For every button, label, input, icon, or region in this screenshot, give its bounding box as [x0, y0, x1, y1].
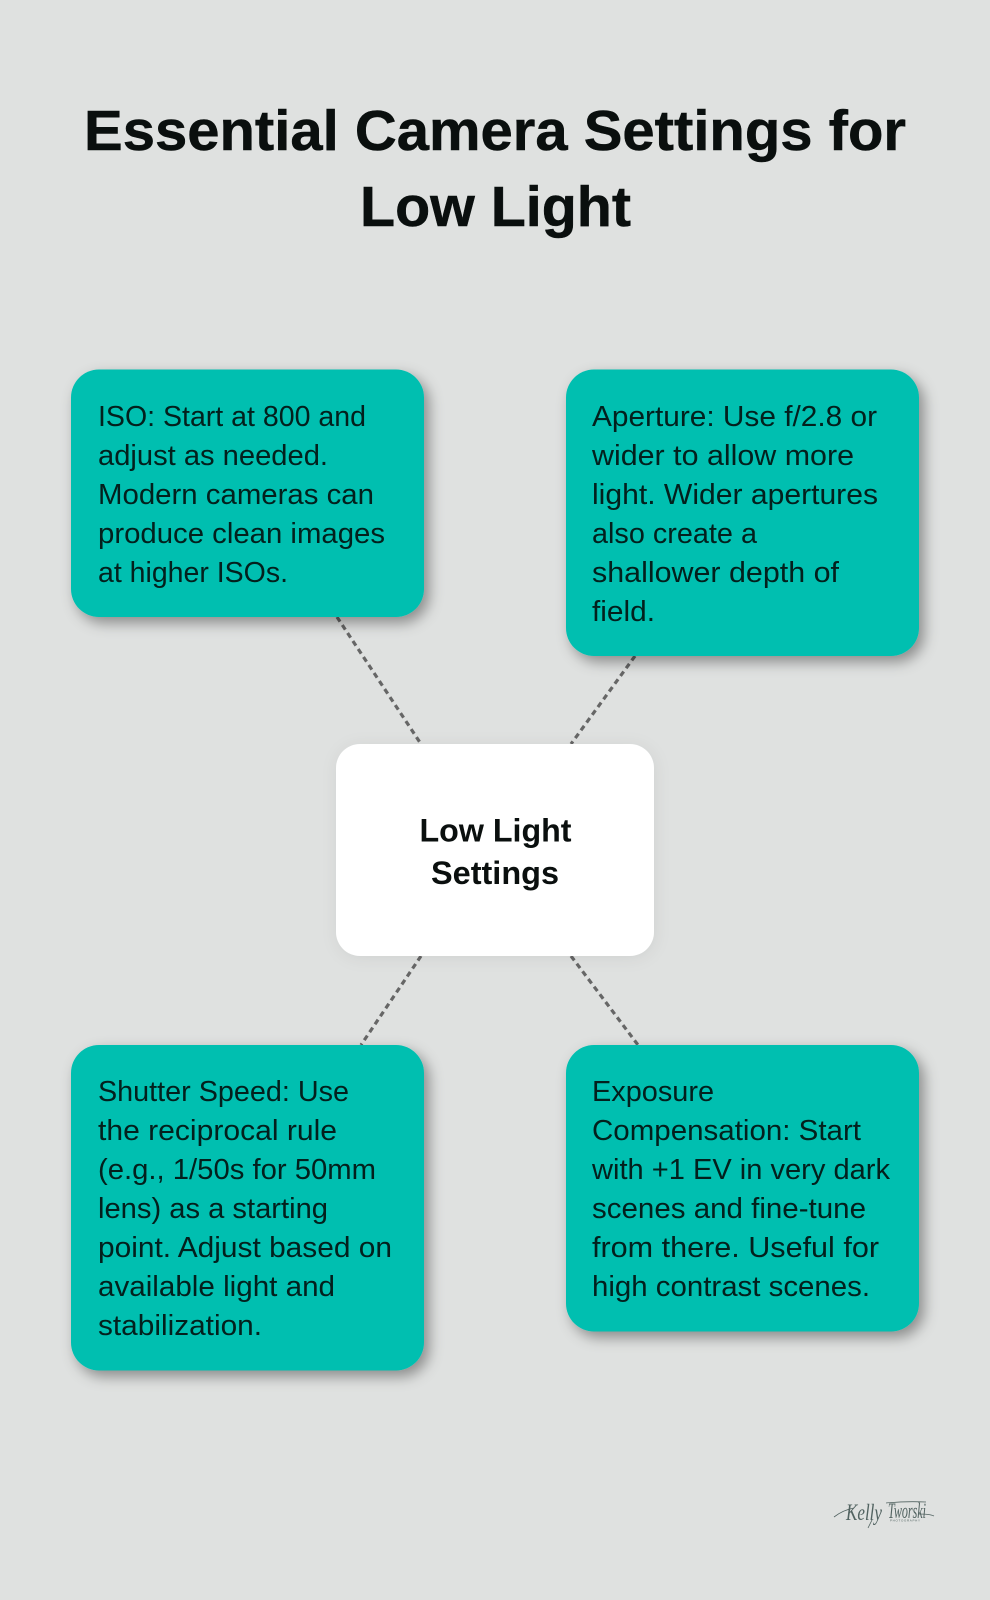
panel: shutter speed: available light and	[98, 1271, 335, 1303]
panel: exposure compensation: Compensation: Start	[592, 1115, 861, 1147]
logo: signature: Tworski	[888, 1498, 926, 1523]
panel: exposure compensation: high contrast scenes.	[592, 1271, 870, 1303]
panel: aperture: Aperture: Use f/2.8 or	[592, 401, 877, 433]
panel: shutter speed	[71, 1045, 424, 1370]
panel: shutter speed: stabilization.	[98, 1310, 262, 1342]
panel: shutter speed: Shutter Speed: Use	[98, 1076, 349, 1108]
panel: center hub: Settings	[431, 855, 559, 891]
panel: aperture: field.	[592, 596, 655, 628]
panel: exposure compensation: scenes and fine-tune	[592, 1193, 866, 1225]
panel: center hub: Low Light	[420, 812, 572, 848]
title: Low Light	[360, 175, 631, 239]
panel: shutter speed: point. Adjust based on	[98, 1232, 392, 1264]
logo: signature	[834, 1498, 934, 1528]
connector: exposure compensation to center	[571, 956, 638, 1045]
panel: exposure compensation: from there. Useful for	[592, 1232, 879, 1264]
logo: signature: PHOTOGRAPHY	[890, 1518, 920, 1522]
logo: signature: Kelly	[845, 1500, 883, 1525]
panel: exposure compensation: Exposure	[592, 1076, 714, 1108]
panel: aperture: shallower depth of	[592, 557, 840, 589]
panel: aperture: wider to allow more	[591, 440, 854, 472]
panel: shutter speed: (e.g., 1/50s for 50mm	[98, 1154, 376, 1186]
title: Essential Camera Settings for	[84, 99, 906, 163]
panel: ISO	[71, 370, 424, 617]
title	[84, 99, 906, 239]
panel: ISO: at higher ISOs.	[98, 557, 288, 589]
panel: exposure compensation: with +1 EV in very dark	[591, 1154, 890, 1186]
panel: aperture: also create a	[592, 518, 758, 550]
connector: aperture to center	[571, 656, 635, 744]
panel: ISO: ISO: Start at 800 and	[98, 401, 366, 433]
panel: aperture: light. Wider apertures	[592, 479, 878, 511]
panel: ISO: adjust as needed.	[98, 440, 328, 472]
panel: shutter speed: lens) as a starting	[98, 1193, 328, 1225]
panel: shutter speed: the reciprocal rule	[98, 1115, 337, 1147]
panel: aperture	[566, 370, 919, 656]
panel: center hub	[336, 744, 654, 956]
panel: ISO: Modern cameras can	[98, 479, 374, 511]
panel: ISO: produce clean images	[98, 518, 385, 550]
connector: ISO to center	[337, 617, 421, 744]
panel: exposure compensation	[566, 1045, 919, 1332]
connector: shutter speed to center	[361, 956, 421, 1045]
